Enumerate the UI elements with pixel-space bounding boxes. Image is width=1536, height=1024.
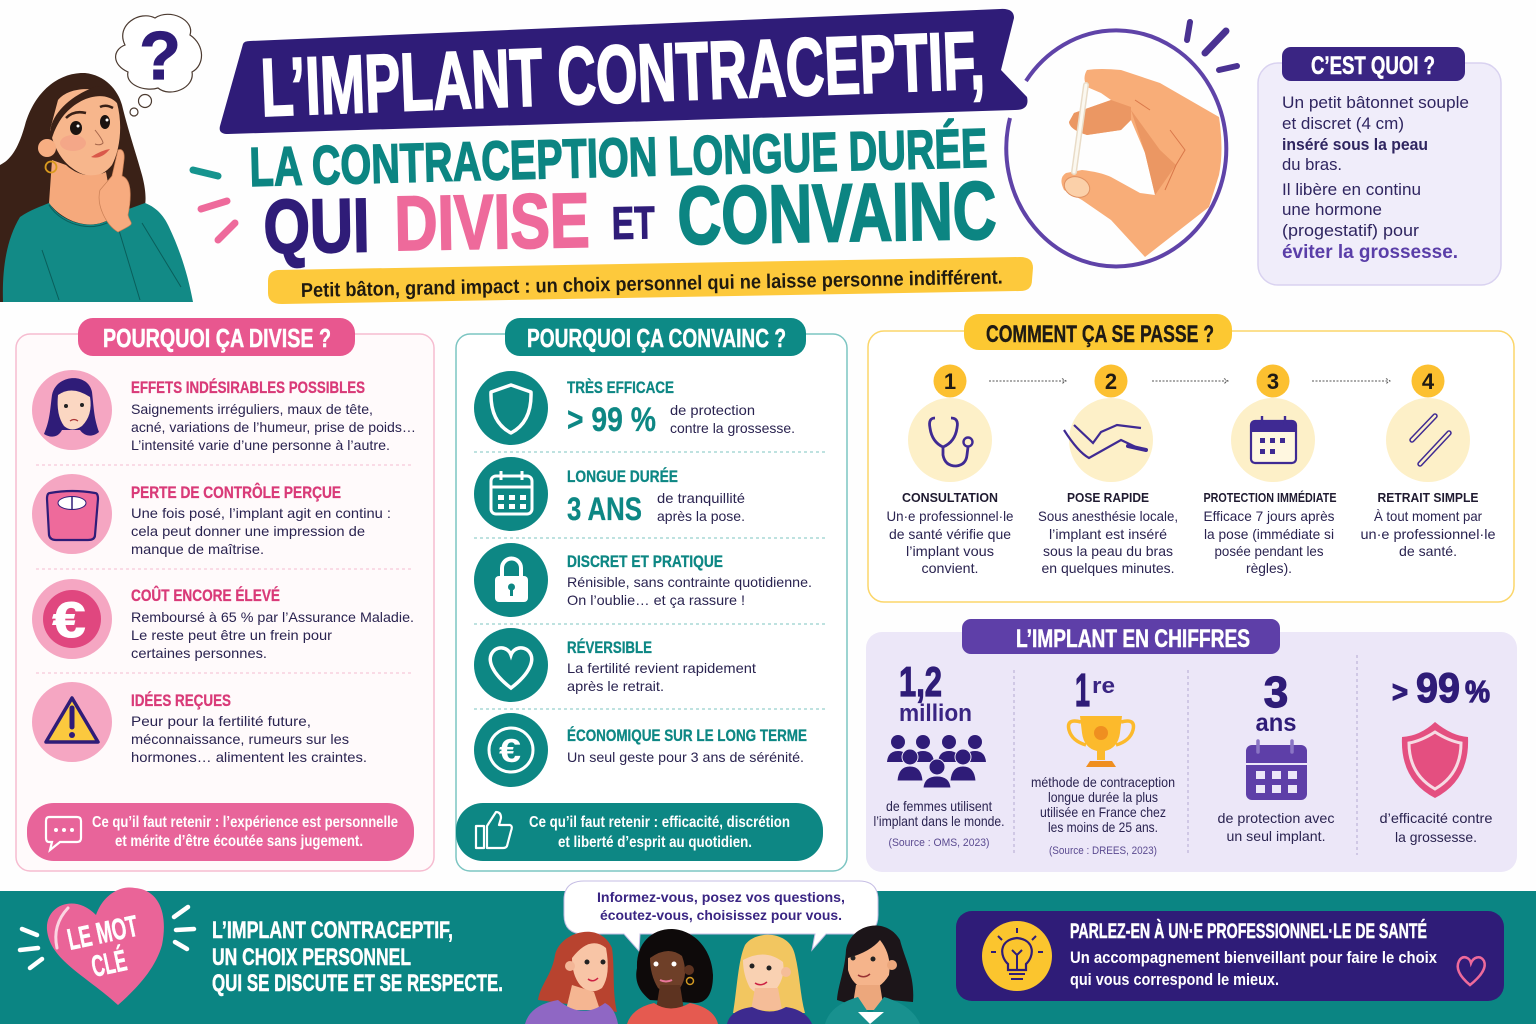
step 3: règles). <box>1246 560 1292 576</box>
key message text: L’IMPLANT CONTRACEPTIF, <box>212 917 453 944</box>
label: c'est quoi <box>1282 47 1465 81</box>
panel: parlez-en: qui vous correspond le mieux. <box>1070 970 1279 989</box>
row: coût: COÛT ENCORE ÉLEVÉ <box>131 586 280 605</box>
illustration: woman 4 <box>825 926 920 1024</box>
text: description: (progestatif) pour <box>1282 221 1419 240</box>
icon: thought bubble with question mark <box>116 14 202 116</box>
row: effets indésirables <box>32 370 416 453</box>
stat: plus de 99 %: d’efficacité contre <box>1380 810 1493 826</box>
row: idées reçues <box>32 682 367 765</box>
arrow 3 <box>1312 378 1390 384</box>
arrow 1 <box>989 378 1066 384</box>
label: c'est quoi: C’EST QUOI ? <box>1311 52 1435 80</box>
illustration: woman 3 <box>727 935 812 1024</box>
stat: 1re: utilisée en France chez <box>1040 804 1166 820</box>
heading: comment ça se passe <box>964 314 1232 350</box>
step 3: 3 <box>1267 369 1279 394</box>
row: perte de contrôle <box>32 474 391 557</box>
stat: 1,2 million: million <box>899 700 972 727</box>
stat: 3 ans: de protection avec <box>1218 810 1334 826</box>
callout: à retenir convainc <box>456 803 823 861</box>
row: effets indésirables: EFFETS INDÉSIRABLES POSSIBLES <box>131 378 365 397</box>
decorative accent strokes left of title <box>193 170 235 240</box>
step 1: convient. <box>922 560 978 576</box>
heading: comment ça se passe: COMMENT ÇA SE PASSE ? <box>986 321 1214 348</box>
row: économique <box>474 713 807 787</box>
heart: le mot clé: LE MOT <box>65 910 141 957</box>
text: description: et discret (4 cm) <box>1282 114 1404 133</box>
row: très efficace: TRÈS EFFICACE <box>567 378 674 397</box>
row: discret: Rénisible, sans contrainte quotidienne. <box>567 574 812 590</box>
step 4: À tout moment par <box>1374 508 1482 524</box>
key message text: QUI SE DISCUTE ET SE RESPECTE. <box>212 970 503 997</box>
step 4: 4 <box>1422 369 1435 394</box>
panel: pourquoi ça convainc <box>456 318 847 871</box>
panel: parlez-en: Un accompagnement bienveillant pour faire le choix <box>1070 948 1437 967</box>
arrow 2 <box>1152 378 1228 384</box>
panel: parlez-en <box>956 911 1504 1001</box>
callout: à retenir divise: et mérite d’être écoutée sans jugement. <box>115 833 363 850</box>
title line 3: DIVISE <box>394 178 590 267</box>
key message text <box>212 917 503 997</box>
step 2: POSE RAPIDE <box>1067 490 1149 505</box>
stat: 3 ans <box>1218 668 1334 844</box>
step 2: en quelques minutes. <box>1042 560 1174 576</box>
illustration: circle with hand holding implant <box>1006 30 1226 266</box>
step 4: un·e professionnel·le <box>1360 526 1496 542</box>
footer band <box>0 891 1536 1024</box>
stat: plus de 99 % <box>1380 664 1493 845</box>
row: coût <box>32 579 414 661</box>
heading: pourquoi ça convainc <box>505 318 806 356</box>
heart: le mot clé: CLÉ <box>88 943 130 984</box>
row: idées reçues: Peur pour la fertilité future, <box>131 713 311 729</box>
stat: plus de 99 %: % <box>1465 674 1490 709</box>
stat: plus de 99 %: > <box>1392 676 1408 709</box>
stat: 1re: les moins de 25 ans. <box>1048 819 1158 835</box>
illustration: thinking woman <box>0 73 193 302</box>
row: coût: Le reste peut être un frein pour <box>131 627 332 643</box>
text: description: une hormone <box>1282 200 1382 219</box>
heading: pourquoi ça divise <box>78 318 355 356</box>
stat: plus de 99 %: la grossesse. <box>1395 829 1477 845</box>
row: économique: € <box>499 732 521 769</box>
text: description: du bras. <box>1282 155 1342 174</box>
callout: à retenir convainc: et liberté d’esprit au quotidien. <box>558 834 752 851</box>
stat: 1re: longue durée la plus <box>1048 789 1158 805</box>
heading: chiffres: L’IMPLANT EN CHIFFRES <box>1016 625 1250 653</box>
step 1: Un·e professionnel·le <box>886 508 1014 524</box>
row: discret <box>474 543 812 617</box>
row: longue durée: après la pose. <box>657 508 745 524</box>
speech bubble: écoutez-vous, choisissez pour vous. <box>600 907 842 923</box>
step 1 <box>886 364 1014 576</box>
title banner: L’IMPLANT CONTRACEPTIF, <box>259 15 986 134</box>
row: longue durée: LONGUE DURÉE <box>567 467 678 486</box>
step 3: posée pendant les <box>1214 543 1324 559</box>
heading: pourquoi ça divise: POURQUOI ÇA DIVISE ? <box>103 323 331 353</box>
stat: 1re: re <box>1092 673 1115 698</box>
illustration: woman 2 <box>627 929 718 1024</box>
step 1: CONSULTATION <box>902 490 998 505</box>
panel: l'implant en chiffres <box>866 619 1517 872</box>
row: réversible: RÉVERSIBLE <box>567 638 652 657</box>
row: très efficace: > 99 % <box>567 401 656 439</box>
step 2: 2 <box>1105 369 1117 394</box>
row: perte de contrôle: cela peut donner une impression de <box>131 523 365 539</box>
callout: à retenir divise <box>27 803 414 861</box>
subtitle banner: Petit bâton, grand impact : un choix personnel qui ne laisse personne indifférent. <box>301 267 1003 302</box>
step 3: la pose (immédiate si <box>1204 526 1334 542</box>
row: coût: certaines personnes. <box>131 645 267 661</box>
step 4: de santé. <box>1399 543 1457 559</box>
row: idées reçues: méconnaissance, rumeurs sur les <box>131 731 349 747</box>
row: perte de contrôle: Une fois posé, l’implant agit en continu : <box>131 505 391 521</box>
step 3: PROTECTION IMMÉDIATE <box>1204 490 1336 505</box>
stat: 1,2 million <box>874 658 1004 849</box>
step 4: RETRAIT SIMPLE <box>1378 490 1479 505</box>
row: réversible: après le retrait. <box>567 678 664 694</box>
stat: 3 ans: ans <box>1256 709 1296 737</box>
step 2: l’implant est inséré <box>1049 526 1167 542</box>
stat: 1,2 million: de femmes utilisent <box>886 798 992 814</box>
row: idées reçues: IDÉES REÇUES <box>131 691 231 710</box>
row: discret: On l’oublie… et ça rassure ! <box>567 592 745 608</box>
icon: thought bubble with question mark: ? <box>139 18 181 94</box>
heart: le mot clé <box>47 887 164 1005</box>
speech bubble: Informez-vous, posez vos questions, <box>597 889 845 905</box>
title line 3: QUI <box>263 183 370 270</box>
accent strokes near circle <box>1187 22 1237 70</box>
title banner <box>220 9 1027 134</box>
row: discret: DISCRET ET PRATIQUE <box>567 552 723 571</box>
heading: chiffres <box>962 619 1280 654</box>
step 3: Efficace 7 jours après <box>1204 508 1334 524</box>
row: très efficace <box>474 371 795 445</box>
stat: 1re <box>1031 664 1175 857</box>
stat: 1re: (Source : DREES, 2023) <box>1049 845 1157 857</box>
step 1: 1 <box>944 369 956 394</box>
step 2: sous la peau du bras <box>1043 543 1173 559</box>
title line 3 <box>263 165 997 270</box>
row: idées reçues: hormones… alimentent les craintes. <box>131 749 367 765</box>
row: effets indésirables: L’intensité varie d’une personne à l’autre. <box>131 437 390 453</box>
stat: 1re: méthode de contraception <box>1031 774 1175 790</box>
callout: à retenir divise: Ce qu’il faut retenir : l’expérience est personnelle <box>92 814 398 831</box>
row: perte de contrôle: manque de maîtrise. <box>131 541 264 557</box>
illustration: woman 1 <box>525 932 618 1024</box>
step 2: Sous anesthésie locale, <box>1038 508 1178 524</box>
step 1: de santé vérifie que <box>889 526 1011 542</box>
row: réversible: La fertilité revient rapidement <box>567 660 756 676</box>
stat: 3 ans: 3 <box>1264 668 1288 717</box>
icon: light bulb <box>982 921 1052 991</box>
text: description: Un petit bâtonnet souple <box>1282 93 1469 112</box>
stat: 3 ans: un seul implant. <box>1226 828 1326 844</box>
row: très efficace: contre la grossesse. <box>670 420 795 436</box>
row: réversible <box>474 628 756 702</box>
stat: 1,2 million: (Source : OMS, 2023) <box>888 837 990 849</box>
text: description: éviter la grossesse. <box>1282 242 1458 263</box>
callout: à retenir convainc: Ce qu’il faut retenir : efficacité, discrétion <box>529 814 790 831</box>
row: effets indésirables: Saignements irréguliers, maux de tête, <box>131 401 373 417</box>
row: longue durée: 3 ANS <box>567 491 642 527</box>
title line 3: ET <box>611 196 655 249</box>
rays around heart <box>20 907 194 968</box>
panel: c'est quoi <box>1258 47 1501 285</box>
stat: 1,2 million: 1,2 <box>899 658 942 705</box>
panel: pourquoi ça divise <box>16 318 434 871</box>
title line 2: LA CONTRACEPTION LONGUE DURÉE <box>249 117 988 198</box>
row: longue durée: de tranquillité <box>657 490 745 506</box>
step 2 <box>1038 364 1178 576</box>
title line 3: CONVAINC <box>677 165 997 262</box>
step 3 <box>1204 364 1336 576</box>
text: description <box>1282 93 1469 263</box>
step 4 <box>1360 364 1496 559</box>
row: coût: Remboursé à 65 % par l’Assurance Maladie. <box>131 609 414 625</box>
text: description: Il libère en continu <box>1282 180 1421 199</box>
stat: plus de 99 %: 99 <box>1416 664 1460 711</box>
row: longue durée <box>474 457 745 531</box>
row: économique: ÉCONOMIQUE SUR LE LONG TERME <box>567 726 807 745</box>
text: description: inséré sous la peau <box>1282 135 1428 154</box>
panel: comment ça se passe <box>868 314 1514 602</box>
row: économique: Un seul geste pour 3 ans de sérénité. <box>567 749 804 765</box>
speech bubble <box>564 881 878 951</box>
step 1: l’implant vous <box>906 543 994 559</box>
stat: 1,2 million: l’implant dans le monde. <box>874 813 1004 829</box>
row: effets indésirables: acné, variations de l’humeur, prise de poids… <box>131 419 416 435</box>
row: très efficace: de protection <box>670 402 755 418</box>
stat: 1re: 1 <box>1075 664 1090 716</box>
heading: pourquoi ça convainc: POURQUOI ÇA CONVAINC ? <box>527 323 786 353</box>
key message text: UN CHOIX PERSONNEL <box>212 944 411 971</box>
row: coût: € <box>52 592 86 648</box>
row: perte de contrôle: PERTE DE CONTRÔLE PERÇUE <box>131 483 341 502</box>
